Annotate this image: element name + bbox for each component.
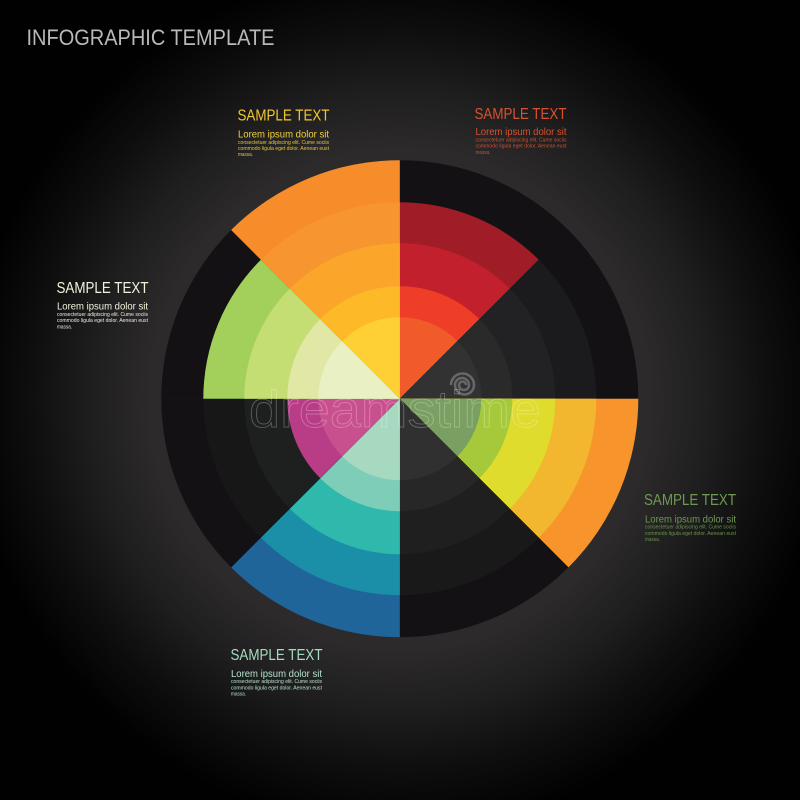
- callout: right: massa.: [645, 537, 660, 543]
- callout: top right: consectetuer adipiscing elit. Cume sociis: [476, 138, 567, 144]
- callout: bottom: massa.: [231, 692, 246, 698]
- callout: top right: commodo ligula eget dolor. Aenean eust: [476, 144, 567, 150]
- callout: right: [644, 492, 737, 543]
- radial segmented wheel: [161, 160, 638, 637]
- segment: dark lower right: [400, 399, 568, 637]
- callout: left: SAMPLE TEXT: [56, 280, 149, 297]
- callout: left: Lorem ipsum dolor sit: [57, 300, 148, 312]
- segment: teal to blue: [231, 399, 400, 637]
- callout: top left: [238, 108, 330, 158]
- segment: orange: [231, 160, 400, 399]
- segment: lime green: [161, 230, 400, 399]
- segment: dark upper right: [400, 230, 638, 399]
- callout: bottom: SAMPLE TEXT: [230, 647, 323, 664]
- callout: bottom: Lorem ipsum dolor sit: [231, 668, 322, 680]
- callout: bottom: consectetuer adipiscing elit. Cume sociis: [231, 679, 322, 685]
- callout: top right: massa.: [476, 150, 490, 156]
- callout: right: consectetuer adipiscing elit. Cume sociis: [645, 524, 736, 530]
- callout: left: consectetuer adipiscing elit. Cume sociis: [57, 312, 148, 318]
- segment: magenta: [161, 399, 400, 567]
- callout: top left: Lorem ipsum dolor sit: [238, 128, 329, 140]
- callout: left: massa.: [57, 324, 72, 330]
- callout: left: [56, 280, 149, 330]
- watermark: dreamstime: [249, 381, 541, 439]
- callout: top right: [474, 106, 567, 156]
- callout: right: commodo ligula eget dolor. Aenean eust: [645, 531, 737, 537]
- segment: red: [400, 160, 568, 399]
- callout: left: commodo ligula eget dolor. Aenean eust: [57, 318, 149, 324]
- callout: right: Lorem ipsum dolor sit: [645, 514, 736, 526]
- callout: top right: SAMPLE TEXT: [474, 106, 567, 123]
- callout: top right: Lorem ipsum dolor sit: [476, 126, 567, 138]
- callout: top left: consectetuer adipiscing elit. Cume sociis: [238, 140, 329, 146]
- callout: bottom: [230, 647, 323, 698]
- callout: top left: SAMPLE TEXT: [238, 108, 330, 124]
- callout: top left: massa.: [238, 152, 253, 158]
- segment: green to orange: [400, 399, 638, 567]
- callout: bottom: commodo ligula eget dolor. Aenean eust: [231, 686, 323, 692]
- title: INFOGRAPHIC TEMPLATE: [26, 25, 274, 50]
- callout: top left: commodo ligula eget dolor. Aenean eust: [238, 146, 330, 152]
- callout: right: SAMPLE TEXT: [644, 492, 736, 509]
